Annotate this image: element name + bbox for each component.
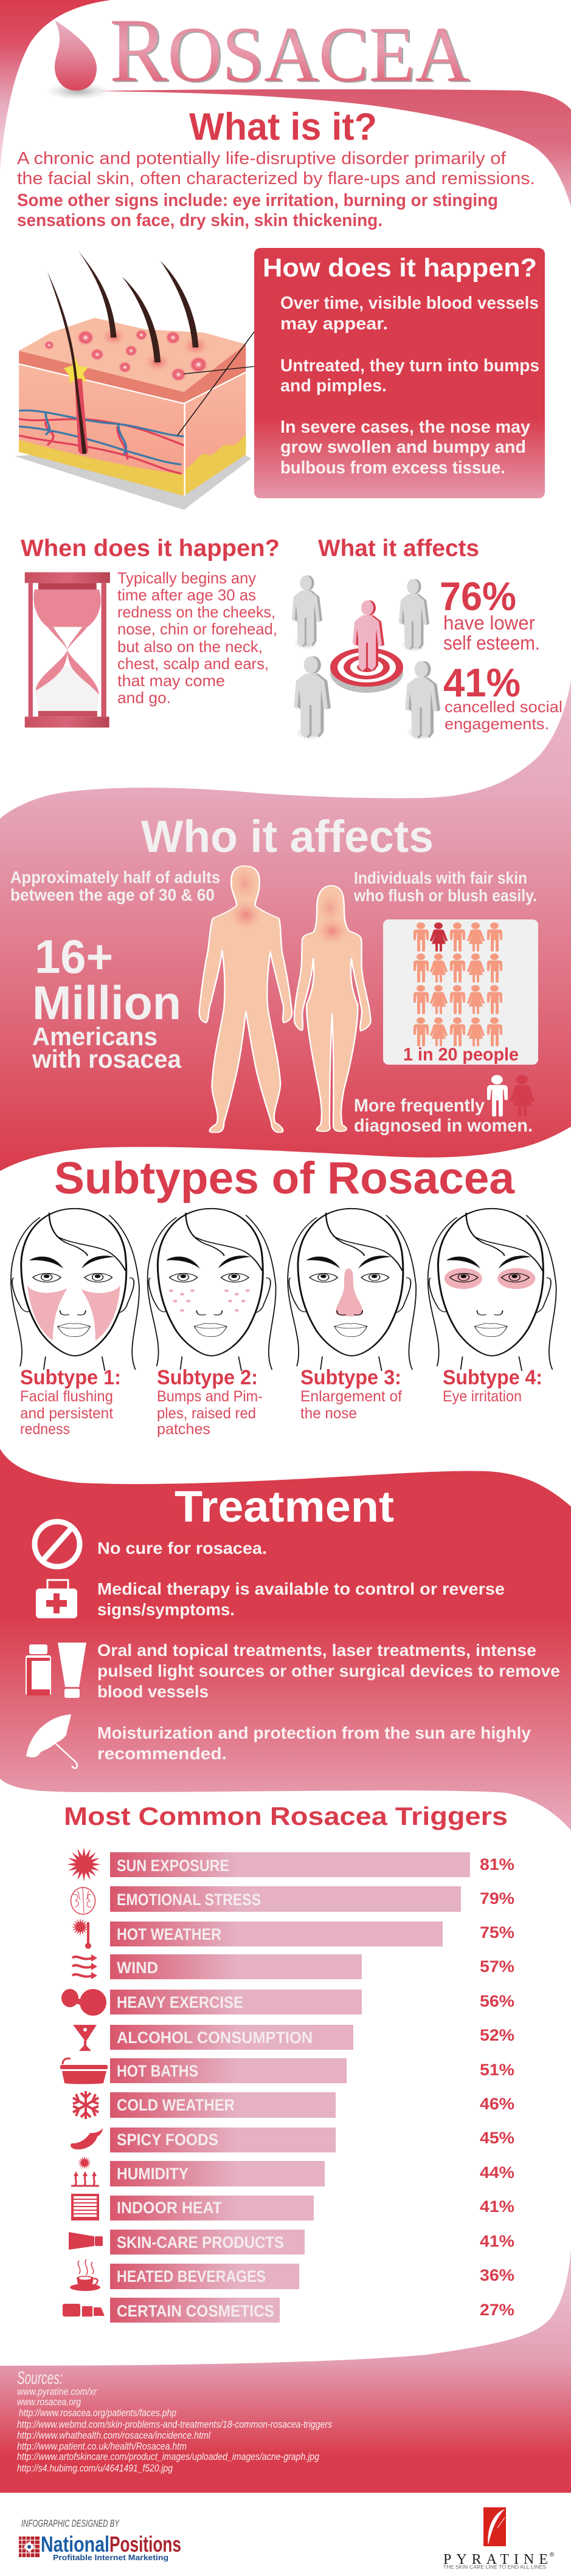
gray person bottom right [405, 661, 440, 740]
label: subtype 2: patches [157, 1421, 210, 1438]
label: subtype 3: Enlargement of [300, 1388, 402, 1405]
label: subtype 3: the nose [300, 1405, 357, 1422]
label: subtype 3 [300, 1366, 402, 1422]
label: subtype 1: Subtype 1: [20, 1366, 121, 1389]
icon: umbrella [26, 1714, 77, 1768]
row: hot baths: HOT BATHS [117, 2062, 198, 2080]
label: subtype 2: Subtype 2: [157, 1366, 258, 1389]
panel: Who it affects [0, 681, 571, 1171]
title: Rosacea: ROSACEA [111, 1, 471, 102]
label: 1 in 20 people: 1 in 20 people [403, 1045, 519, 1065]
text: source list [17, 2386, 332, 2474]
label: subtype 1: redness [20, 1421, 70, 1438]
stat: 76% [440, 574, 540, 654]
heading: Sources: Sources: [17, 2368, 63, 2388]
text: moisturization [97, 1723, 531, 1763]
row: cold weather: 46% [480, 2095, 514, 2113]
stat: 76%: have lower [443, 612, 535, 634]
text block: when it happens: Typically begins any [117, 569, 256, 587]
stat: 16+ million: Americans [32, 1022, 157, 1051]
text: oral and topical: pulsed light sources or other surgical devices to remove [97, 1661, 560, 1680]
eye irritation overlay [445, 1268, 535, 1289]
logo: National Positions [19, 2532, 181, 2562]
row: wind: 57% [480, 1957, 514, 1976]
face: subtype 3 [288, 1209, 416, 1371]
text: source list: www.pyratine.com/xr [17, 2386, 97, 2397]
illustration: skin cross-section [15, 251, 277, 510]
skin bumps [44, 329, 208, 382]
row: humidity: HUMIDITY [117, 2165, 189, 2183]
illustration: man and woman [199, 866, 371, 1133]
logo: Pyratine [443, 2507, 555, 2570]
stat: 16+ million: with rosacea [32, 1045, 182, 1073]
text: source list: http://s4.hubimg.com/u/4641491_f520.jpg [17, 2462, 173, 2474]
row: skin-care products [69, 2230, 514, 2255]
heading: Subtypes of Rosacea: Subtypes of Rosacea [54, 1153, 515, 1203]
stat: 41% [443, 660, 562, 733]
row: sun exposure: SUN EXPOSURE [117, 1856, 229, 1875]
row: cold weather: COLD WEATHER [117, 2096, 235, 2114]
cheek flushing overlay [27, 1285, 120, 1341]
text: fair skin [353, 868, 537, 905]
label: subtype 1: and persistent [20, 1405, 113, 1422]
logo: National Positions: Positions [109, 2532, 181, 2557]
gray person top left [292, 575, 322, 650]
row: hot weather [72, 1918, 514, 1949]
label: subtype 1: Facial flushing [20, 1388, 113, 1405]
text: medical therapy: Medical therapy is available to control or reverse [97, 1579, 505, 1598]
title: Rosacea: ROSACEA [109, 0, 469, 101]
text: age range [10, 868, 220, 904]
row: hot baths: 51% [480, 2061, 514, 2079]
heading: What is it?: What is it? [189, 106, 377, 148]
heading: What it affects: What it affects [318, 535, 479, 562]
background: top-left corner ribbon [0, 0, 111, 173]
row: hot baths [60, 2058, 514, 2084]
face: subtype 4 [428, 1209, 556, 1371]
row: heavy exercise [61, 1989, 514, 2016]
stat: 16+ million: 16+ [35, 930, 113, 983]
icon: male and female [487, 1075, 535, 1116]
text: source list: http://www.patient.co.uk/health/Rosacea.htm [17, 2440, 187, 2452]
row: heated beverages [70, 2259, 514, 2291]
text block: when it happens: that may come [117, 671, 225, 690]
row: humidity: 44% [480, 2163, 514, 2182]
text: explanations: bulbous from excess tissue. [280, 458, 505, 478]
logo: Pyratine: ® [550, 2552, 555, 2558]
row: humidity [71, 2156, 514, 2186]
credit: infographic designed by: INFOGRAPHIC DESIGNED BY [21, 2518, 120, 2529]
row: sun exposure [67, 1847, 514, 1881]
text: oral and topical: Oral and topical treatments, laser treatments, intense [97, 1641, 536, 1660]
pictogram row 4 [414, 1017, 502, 1046]
icon: bottle and tube [26, 1643, 86, 1698]
logo: Pyratine: THE SKIN CARE LINE TO END ALL LINES [443, 2564, 546, 2570]
row: alcohol consumption: 52% [480, 2026, 514, 2044]
row: emotional stress [71, 1886, 514, 1914]
text: oral and topical [97, 1641, 560, 1701]
stat: 76%: self esteem. [443, 632, 540, 654]
gray person top right [399, 579, 429, 652]
stat: 41%: 41% [443, 660, 521, 705]
row: spicy foods: 45% [480, 2129, 514, 2147]
label: subtype 3: Subtype 3: [300, 1366, 401, 1389]
label: subtype 2: Bumps and Pim- [157, 1388, 263, 1405]
text: fair skin: who flush or blush easily. [353, 886, 537, 905]
panel: Treatment [0, 1449, 571, 1830]
row: spicy foods [71, 2128, 514, 2152]
text: source list: http://www.artofskincare.com/product_images/uploaded_images/acne-graph.jpg [17, 2451, 319, 2462]
row: alcohol consumption [73, 2025, 514, 2051]
background: header swoosh [97, 89, 571, 207]
icon: hourglass [25, 572, 110, 727]
row: sun exposure: 81% [480, 1855, 514, 1874]
gray person bottom left [294, 656, 331, 740]
text block: definition: sensations on face, dry skin, skin thickening. [17, 211, 382, 230]
text: moisturization: recommended. [97, 1744, 227, 1763]
text: no cure: No cure for rosacea. [97, 1539, 267, 1558]
text: medical therapy [97, 1579, 505, 1619]
icon: no symbol [35, 1522, 80, 1567]
text: explanations: Untreated, they turn into bumps [280, 356, 539, 376]
panel: 1 in 20 people [383, 919, 538, 1065]
row: cold weather [73, 2091, 514, 2119]
row: heated beverages: 36% [480, 2266, 514, 2284]
pictogram row 1 [414, 922, 502, 952]
text block: when it happens: nose, chin or forehead, [117, 620, 277, 638]
row: spicy foods: SPICY FOODS [117, 2131, 218, 2149]
icon: medical bag [36, 1580, 77, 1618]
highlighted person [353, 600, 384, 671]
woman figure [294, 886, 371, 1132]
panel: Sources [0, 2248, 571, 2493]
text block: when it happens: chest, scalp and ears, [117, 654, 269, 673]
row: heavy exercise: 56% [480, 1992, 514, 2010]
heading: How does it happen?: How does it happen? [263, 253, 537, 283]
row: skin-care products: 41% [480, 2232, 514, 2250]
text block: definition [17, 149, 535, 230]
text: explanations: may appear. [280, 314, 388, 334]
label: subtype 2: ples, raised red [157, 1405, 256, 1422]
row: emotional stress: EMOTIONAL STRESS [117, 1891, 261, 1909]
row: heavy exercise: HEAVY EXERCISE [117, 1993, 243, 2011]
text: moisturization: Moisturization and protection from the sun are highly [97, 1723, 531, 1742]
heading: Treatment: Treatment [175, 1483, 394, 1531]
text block: when it happens: but also on the neck, [117, 637, 263, 656]
row: wind: WIND [117, 1959, 158, 1977]
text block: definition: Some other signs include: eye irritation, burning or stinging [17, 191, 498, 210]
icon: yellow irritation star [64, 357, 88, 383]
pictogram row 2 [414, 953, 502, 983]
icon: people around target [292, 575, 440, 740]
hair follicle [75, 379, 88, 454]
row: heated beverages: HEATED BEVERAGES [117, 2267, 266, 2286]
text: explanations: In severe cases, the nose may [280, 417, 530, 437]
icon: rosacea drop logo [46, 20, 109, 100]
text block: definition: the facial skin, often characterized by flare-ups and remissions. [17, 169, 535, 188]
text: source list: www.rosacea.org [17, 2396, 81, 2408]
text block: when it happens: time after age 30 as [117, 586, 256, 604]
text: explanations: and pimples. [280, 376, 387, 396]
target [330, 648, 403, 693]
leader lines [178, 301, 277, 436]
text: age range: Approximately half of adults [10, 868, 220, 887]
label: subtype 2 [157, 1366, 263, 1438]
text block: when it happens: redness on the cheeks, [117, 603, 275, 621]
text: more frequently in women [354, 1096, 533, 1136]
hairs [47, 251, 198, 454]
row: alcohol consumption: ALCOHOL CONSUMPTION [117, 2028, 313, 2047]
row: indoor heat [71, 2194, 514, 2221]
row: hot weather: 75% [480, 1923, 514, 1942]
row: emotional stress: 79% [480, 1889, 514, 1908]
text: oral and topical: blood vessels [97, 1682, 209, 1701]
text: explanations: Over time, visible blood vessels [280, 294, 539, 313]
face: subtype 2 [148, 1209, 276, 1371]
logo: National Positions: Profitable Internet Marketing [53, 2553, 168, 2562]
text block: when it happens: and go. [117, 689, 171, 707]
enlarged nose overlay [336, 1269, 363, 1316]
stat: 16+ million [32, 930, 182, 1073]
text: fair skin: Individuals with fair skin [354, 868, 527, 887]
chart: trigger bars [60, 1847, 514, 2323]
logo grid [19, 2537, 40, 2557]
text: explanations [280, 294, 539, 478]
row: hot weather: HOT WEATHER [117, 1925, 221, 1943]
label: subtype 4: Eye irritation [443, 1388, 522, 1405]
text block: definition: A chronic and potentially life-disruptive disorder primarily of [17, 149, 507, 168]
text: source list: http://www.rosacea.org/patients/faces.php [19, 2407, 176, 2419]
panel: How does it happen [254, 248, 545, 498]
row: certain cosmetics: CERTAIN COSMETICS [117, 2302, 274, 2320]
text: explanations: grow swollen and bumpy and [280, 438, 526, 457]
text: source list: http://www.webmd.com/skin-problems-and-treatments/18-common-rosacea-triggers [17, 2419, 332, 2430]
row: wind [72, 1954, 514, 1979]
row: indoor heat: 41% [480, 2197, 514, 2216]
row: certain cosmetics [63, 2298, 514, 2323]
row: indoor heat: INDOOR HEAT [117, 2199, 222, 2217]
man figure [199, 866, 292, 1133]
text: source list: http://www.whathealth.com/rosacea/incidence.html [17, 2430, 211, 2441]
stat: 41%: cancelled social [445, 698, 562, 716]
label: subtype 4: Subtype 4: [443, 1366, 542, 1389]
heading: Most Common Rosacea Triggers: Most Common Rosacea Triggers [64, 1802, 508, 1830]
text: medical therapy: signs/symptoms. [97, 1600, 235, 1619]
text: age range: between the age of 30 & 60 [10, 885, 215, 904]
face: subtype 1 [11, 1209, 139, 1371]
pictogram row 3 [414, 985, 502, 1014]
logo: Pyratine: PYRATINE [443, 2552, 548, 2567]
text block: when it happens [117, 569, 277, 707]
stat: 16+ million: Million [32, 976, 181, 1029]
stat: 41%: engagements. [445, 715, 549, 733]
row: certain cosmetics: 27% [480, 2301, 514, 2319]
row: skin-care products: SKIN-CARE PRODUCTS [117, 2233, 284, 2251]
stat: 76%: 76% [440, 574, 516, 619]
label: subtype 4 [443, 1366, 542, 1405]
heading: When does it happen?: When does it happen? [21, 535, 280, 562]
text: more frequently in women: diagnosed in women. [354, 1116, 533, 1136]
bump dots overlay [169, 1290, 250, 1312]
text: more frequently in women: More frequently [354, 1096, 485, 1116]
heading: Who it affects: Who it affects [141, 811, 434, 862]
logo: National Positions: National [41, 2532, 109, 2557]
label: subtype 1 [20, 1366, 121, 1438]
